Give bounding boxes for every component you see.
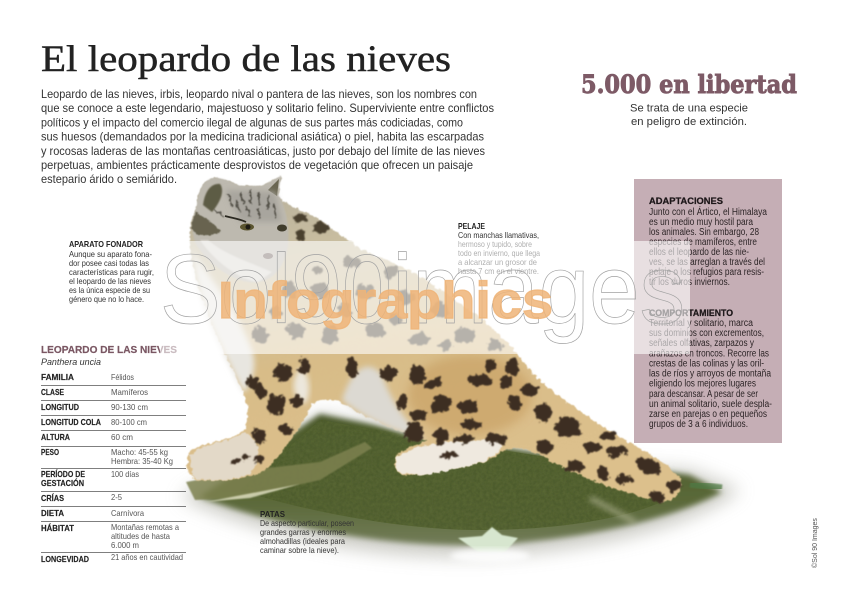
table rows: 6.000 m (111, 540, 139, 550)
label: patas: De aspecto particular, poseen (260, 518, 354, 528)
callout: 5.000 en libertad: Se trata de una especie (630, 102, 748, 114)
intro text: políticos y el impacto del comercio ilegal de algunas de sus partes más codiciadas, como (41, 116, 463, 130)
tan haunch shading (408, 355, 532, 435)
watermark band (160, 241, 690, 354)
label: pelaje: hasta 7 cm en el vientre. (458, 266, 539, 276)
table rows: CRÍAS (41, 493, 64, 503)
table rows: Macho: 45-55 kg (111, 447, 168, 457)
label: patas: grandes garras y enormes (260, 527, 346, 537)
label: pelaje: hermoso y tupido, sobre (458, 239, 532, 249)
table rows: ALTURA (41, 432, 70, 442)
upper body rosettes (252, 214, 503, 351)
table rows: LONGITUD COLA (41, 417, 101, 427)
comportamiento text (649, 308, 772, 430)
species name: Panthera uncia (41, 357, 101, 368)
table rows: CLASE (41, 387, 64, 397)
table rows: LONGITUD (41, 402, 79, 412)
intro text: que se conoce a este legendario, majestuoso y solitario felino. Superviviente entre conflictos (41, 101, 494, 115)
grass highlight streaks (186, 442, 722, 522)
table rows (41, 372, 186, 564)
comportamiento text: señales olfativas, zarpazos y (649, 338, 754, 349)
comportamiento text: COMPORTAMIENTO (649, 308, 733, 319)
adaptaciones text (649, 196, 767, 288)
label: aparato fonador: género que no lo hace. (69, 294, 144, 304)
table rows: Carnívora (111, 508, 144, 518)
table rows: PERÍODO DE (41, 469, 85, 479)
panel: adaptaciones y comportamiento (634, 179, 782, 443)
comportamiento text: Territorial y solitario, marca (649, 318, 753, 329)
comportamiento text: eligiendo los mejores lugares (649, 378, 756, 390)
label: aparato fonador: es la única especie de su (69, 285, 150, 295)
comportamiento text: un animal solitario, suele despla- (649, 399, 772, 410)
label: pelaje: Con manchas llamativas, (458, 230, 539, 240)
label: patas (260, 509, 354, 555)
callout: 5.000 en libertad: 5.000 en libertad (581, 70, 797, 99)
adaptaciones text: ves, se las arreglan a través del (649, 257, 765, 268)
table rows: GESTACIÓN (41, 477, 84, 488)
table rows: DIETA (41, 508, 64, 518)
comportamiento text: grupos de 3 a 6 individuos. (649, 419, 748, 430)
table rows: PESO (41, 447, 59, 457)
table rows: HÁBITAT (41, 523, 75, 533)
table rows: 21 años en cautividad (111, 552, 183, 562)
data table: leopardo de las nieves (41, 344, 186, 564)
comportamiento text: arañazos en troncos. Recorre las (649, 348, 769, 360)
table rows: altitudes de hasta (111, 531, 170, 541)
body silhouette (187, 176, 681, 501)
table rows: 100 días (111, 469, 139, 479)
adaptaciones text: especies de mamíferos, entre (649, 237, 757, 248)
label: pelaje: PELAJE (458, 221, 485, 231)
table rows: 60 cm (111, 432, 133, 442)
table rows: 80-100 cm (111, 417, 147, 427)
adaptaciones text: ADAPTACIONES (649, 196, 723, 207)
comportamiento text: para descansar. A pesar de ser (649, 389, 759, 400)
table rows: Hembra: 35-40 Kg (111, 456, 173, 466)
label: pelaje: a alcanzar un grosor de (458, 257, 537, 267)
comportamiento text: zarse en parejas o en pequeños (649, 409, 767, 420)
intro text (41, 87, 494, 186)
label: pelaje: todo en invierno, que llega (458, 248, 540, 258)
icon: pale leaf on the ground (458, 527, 518, 552)
comportamiento text: crestas de las colinas y las oril- (649, 358, 764, 370)
label: aparato fonador: características para rugir, (69, 267, 154, 277)
label: aparato fonador (69, 239, 154, 304)
callout: 5.000 en libertad: en peligro de extinción. (631, 116, 747, 128)
intro text: sus huesos (demandados por la medicina tradicional asiática) o piel, habita las escarpadas (41, 130, 484, 144)
adaptaciones text: es un medio muy hostil para (649, 217, 753, 228)
label: patas: PATAS (260, 509, 285, 519)
table rows: 90-130 cm (111, 402, 148, 412)
intro text: y rocosas laderas de las montañas centroasiáticas, justo por debajo del límite de las nieves (41, 144, 485, 158)
label: aparato fonador: APARATO FONADOR (69, 239, 143, 249)
table rows: Félidos (111, 372, 134, 382)
label: aparato fonador: dor posee casi todas las (69, 258, 149, 268)
lower body spots (231, 356, 681, 504)
table rows: LONGEVIDAD (41, 554, 89, 564)
watermark: Infographics: Infographics (218, 272, 553, 330)
label: patas: caminar sobre la nieve). (260, 545, 339, 555)
comportamiento text: sus dominios con excrementos, (649, 328, 764, 339)
ground: grassy mound (180, 414, 740, 563)
adaptaciones text: pelaje o los refugios para resis- (649, 267, 764, 278)
adaptaciones text: tir los duros inviernos. (649, 277, 730, 288)
watermark: Sol90images: Sol90images (160, 234, 685, 344)
table rows: Mamíferos (111, 387, 148, 397)
intro text: Leopardo de las nieves, irbis, leopardo nival o pantera de las nieves, son los nombres con (41, 87, 477, 101)
table rows: Montañas remotas a (111, 522, 179, 532)
callout: 5.000 en libertad (581, 70, 797, 128)
adaptaciones text: los animales. Sin embargo, 28 (649, 227, 759, 238)
label: aparato fonador: Aunque su aparato fona- (69, 249, 152, 259)
head (191, 176, 288, 282)
label: aparato fonador: el leopardo de las nieves (69, 276, 151, 286)
label: pelaje (458, 221, 540, 276)
intro text: estepario árido o semiárido. (41, 172, 177, 186)
adaptaciones text: Junto con el Ártico, el Himalaya (649, 205, 767, 218)
label: patas: almohadillas (ideales para (260, 536, 345, 546)
intro text: perpetuas, ambientes prácticamente desprovistos de vegetación que ofrecen un paisaje (41, 158, 473, 172)
white chest and belly fur (190, 250, 501, 480)
illustration: snow leopard (187, 176, 681, 504)
table rows: FAMILIA (41, 372, 74, 382)
title: El leopardo de las nieves (41, 39, 451, 80)
table heading: LEOPARDO DE LAS NIEVES (41, 344, 177, 356)
credit: ©Sol 90 Images (811, 518, 819, 568)
table rows: 2-5 (111, 492, 122, 502)
comportamiento text: las de ríos y arroyos de montaña (649, 368, 771, 380)
adaptaciones text: ellos el leopardo de las nie- (649, 247, 749, 258)
